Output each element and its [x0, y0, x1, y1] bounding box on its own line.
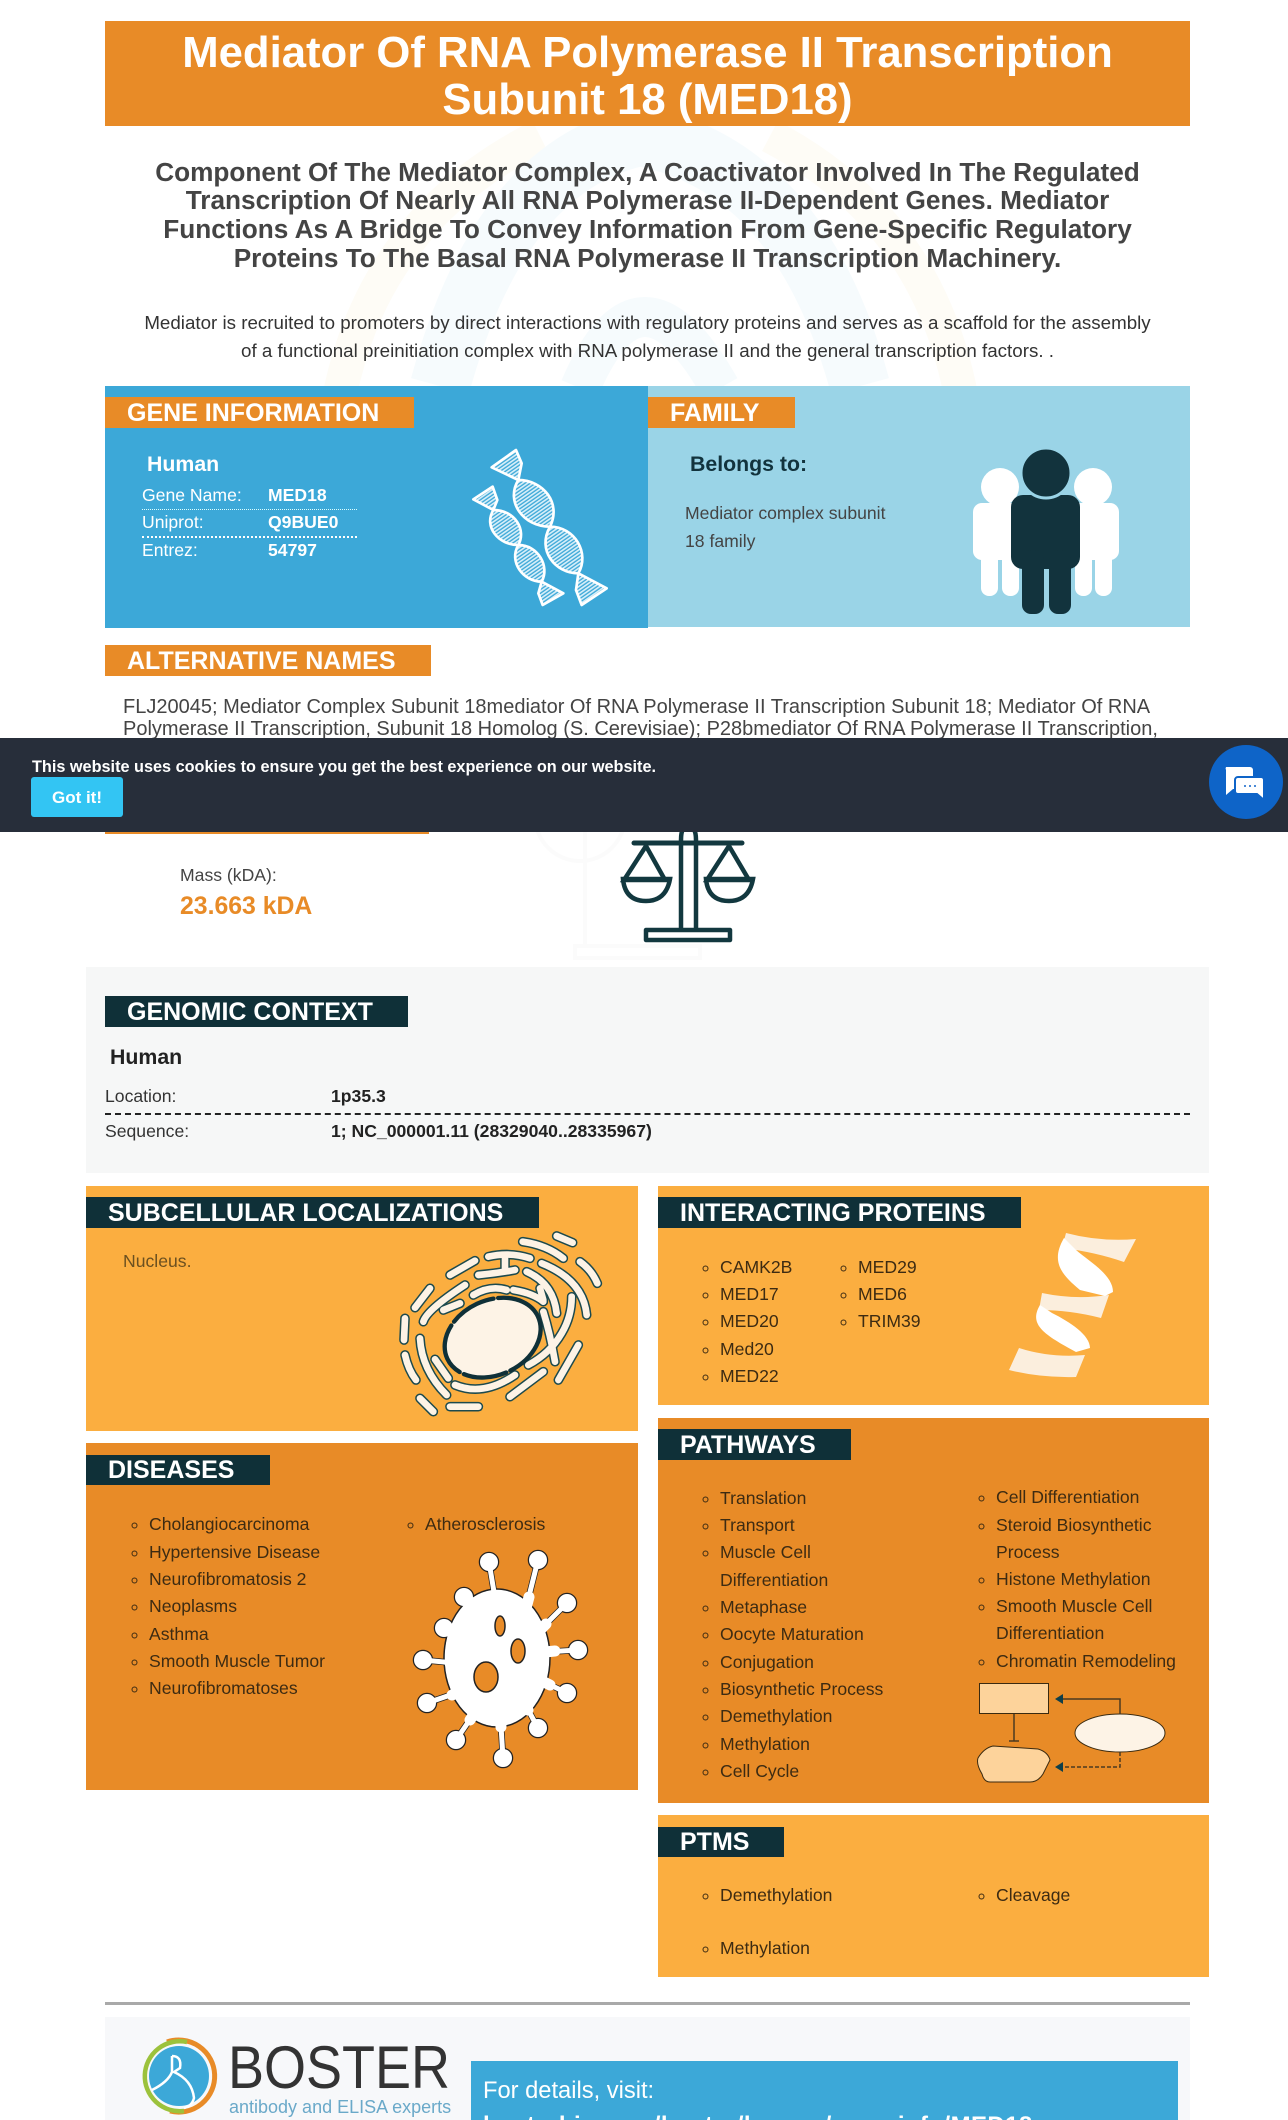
disease list column 1: Cholangiocarcinoma — [149, 1514, 309, 1534]
title banner — [105, 21, 1190, 126]
disease list column 1: Neurofibromatosis 2 — [149, 1569, 306, 1589]
belongs to label: Belongs to: — [690, 452, 807, 476]
icon: virus — [412, 1550, 588, 1768]
title banner: Mediator Of RNA Polymerase II Transcription — [182, 28, 1113, 77]
heading: alternative names: ALTERNATIVE NAMES — [127, 647, 396, 675]
panel: PTMs — [658, 1815, 1209, 1977]
pathway list column 2: Cell Differentiation — [996, 1487, 1139, 1507]
panel: genomic context: 1p35.3 — [331, 1086, 386, 1106]
protein list column 2: MED29 — [858, 1256, 917, 1276]
pathway list column 2: Histone Methylation — [996, 1569, 1151, 1589]
mass value: 23.663 kDA — [180, 893, 312, 920]
family text: Mediator complex subunit — [685, 503, 885, 523]
subtitle: Proteins To The Basal RNA Polymerase II Transcription Machinery. — [234, 243, 1061, 273]
pathway list column 1: Differentiation — [720, 1570, 828, 1590]
logo wordmark: BOSTER — [228, 2034, 450, 2101]
disease list column 1: Hypertensive Disease — [149, 1542, 320, 1562]
panel: interacting proteins — [658, 1186, 1209, 1405]
family text — [685, 503, 886, 551]
PTM list column 1: Methylation — [720, 1938, 810, 1958]
alternative names text: FLJ20045; Mediator Complex Subunit 18mediator Of RNA Polymerase II Transcription Subunit 18; Mediator Of RNA — [123, 696, 1150, 718]
heading: diseases — [86, 1455, 270, 1485]
heading: PTMs: PTMS — [680, 1828, 749, 1856]
panel: gene information — [105, 386, 648, 628]
cookie bar — [0, 738, 1288, 832]
description paragraph: Mediator is recruited to promoters by direct interactions with regulatory proteins and serves as a scaffold for the assembly — [144, 312, 1151, 333]
protein list column 1: CAMK2B — [720, 1256, 792, 1276]
heading: PTMs — [658, 1827, 784, 1857]
panel: genomic context — [86, 967, 1209, 1173]
panel: diseases — [86, 1443, 638, 1790]
heading: pathways: PATHWAYS — [680, 1431, 816, 1459]
gene fields: Q9BUE0 — [268, 512, 338, 532]
pathway list column 2: Process — [996, 1542, 1060, 1562]
pathway list column 2 — [978, 1487, 1176, 1671]
subtitle: Transcription Of Nearly All RNA Polymerase II-Dependent Genes. Mediator — [186, 185, 1109, 215]
title banner: Subunit 18 (MED18) — [442, 75, 853, 124]
pathway list column 1: Muscle Cell — [720, 1542, 811, 1562]
protein list column 1: MED20 — [720, 1311, 779, 1331]
pathway list column 1: Biosynthetic Process — [720, 1679, 883, 1699]
localization text: Nucleus. — [123, 1251, 191, 1271]
disease list column 1: Neoplasms — [149, 1596, 237, 1616]
protein list column 1: Med20 — [720, 1339, 774, 1359]
disease list column 2: Atherosclerosis — [425, 1514, 545, 1534]
sequence row: Sequence: — [105, 1121, 189, 1141]
gene fields: Gene Name: — [142, 485, 242, 505]
icon: pathway diagram — [977, 1683, 1166, 1782]
logo tagline: antibody and ELISA experts — [229, 2097, 451, 2117]
heading: gene information: GENE INFORMATION — [127, 399, 379, 427]
heading: family: FAMILY — [670, 399, 759, 427]
pathway list column 2: Chromatin Remodeling — [996, 1651, 1176, 1671]
subtitle: Functions As A Bridge To Convey Information From Gene-Specific Regulatory — [163, 214, 1132, 244]
icon: protein ribbon — [1009, 1233, 1136, 1378]
pathway list column 2: Differentiation — [996, 1623, 1104, 1643]
icon: people group — [973, 450, 1119, 614]
gene fields: 54797 — [268, 540, 317, 560]
details box — [471, 2061, 1178, 2120]
mass label: Mass (kDA): — [180, 865, 277, 885]
icon: balance scale — [620, 832, 756, 942]
gene fields: Uniprot: — [142, 512, 204, 532]
PTM list column 1: Demethylation — [720, 1885, 832, 1905]
cookie button: Got it! — [52, 788, 102, 807]
location row: Location: — [105, 1086, 176, 1106]
family text: 18 family — [685, 531, 755, 551]
cookie button — [31, 777, 123, 817]
gene fields — [142, 485, 357, 560]
pathway list column 1: Methylation — [720, 1734, 810, 1754]
PTM list column 1 — [702, 1885, 832, 1958]
pathway list column 1: Metaphase — [720, 1597, 807, 1617]
species label: Human — [147, 452, 219, 476]
icon: cell nucleus — [399, 1231, 602, 1416]
protein list column 2: TRIM39 — [858, 1311, 921, 1331]
heading: subcellular localizations: SUBCELLULAR LOCALIZATIONS — [108, 1199, 503, 1227]
molecular mass heading edge — [105, 820, 429, 834]
panel: genomic context: 1; NC_000001.11 (28329040..28335967) — [331, 1121, 652, 1141]
description paragraph: of a functional preinitiation complex with RNA polymerase II and the general transcription factors. . — [241, 340, 1054, 361]
PTM list column 2: Cleavage — [996, 1885, 1070, 1905]
subtitle: Component Of The Mediator Complex, A Coactivator Involved In The Regulated — [155, 156, 1140, 186]
protein list column 2: MED6 — [858, 1284, 907, 1304]
watermark: faint logo background — [324, 126, 976, 386]
cookie message: This website uses cookies to ensure you get the best experience on our website. — [32, 758, 656, 776]
details label: For details, visit: — [483, 2078, 654, 2104]
pathway list column 1: Cell Cycle — [720, 1761, 799, 1781]
heading: diseases: DISEASES — [108, 1456, 234, 1484]
pathway list column 2: Smooth Muscle Cell — [996, 1596, 1152, 1616]
heading: pathways — [658, 1429, 851, 1460]
heading: family — [648, 397, 795, 428]
pathway list column 1: Translation — [720, 1488, 806, 1508]
panel: pathways — [658, 1418, 1209, 1803]
description paragraph — [144, 312, 1151, 361]
protein list column 1 — [702, 1256, 792, 1386]
pathway list column 1: Conjugation — [720, 1652, 814, 1672]
panel: family — [648, 386, 1190, 627]
heading: interacting proteins: INTERACTING PROTEINS — [680, 1199, 986, 1227]
alternative names text: Polymerase II Transcription, Subunit 18 Homolog (S. Cerevisiae); P28bmediator Of RNA Polymerase II Transcription, — [123, 718, 1158, 740]
chat button — [1209, 745, 1283, 819]
heading: genomic context: GENOMIC CONTEXT — [127, 998, 373, 1026]
panel: subcellular localizations — [86, 1186, 638, 1431]
disease list column 1: Asthma — [149, 1624, 209, 1644]
panel: footer — [105, 2017, 1190, 2120]
species label: Human — [110, 1045, 182, 1069]
disease list column 1: Neurofibromatoses — [149, 1678, 298, 1698]
disease list column 1: Smooth Muscle Tumor — [149, 1651, 325, 1671]
gene fields: Entrez: — [142, 540, 198, 560]
disease list column 1 — [132, 1514, 325, 1698]
icon: DNA helices — [472, 448, 608, 606]
pathway list column 1 — [702, 1488, 883, 1781]
protein list column 1: MED22 — [720, 1366, 779, 1386]
divider — [105, 2002, 1190, 2005]
pathway list column 2: Steroid Biosynthetic — [996, 1514, 1152, 1534]
protein list column 2 — [840, 1256, 921, 1331]
alternative names text — [123, 696, 1158, 740]
pathway list column 1: Demethylation — [720, 1706, 832, 1726]
logo mark — [142, 2038, 218, 2115]
pathway list column 1: Oocyte Maturation — [720, 1624, 864, 1644]
protein list column 1: MED17 — [720, 1284, 779, 1304]
subtitle — [155, 156, 1140, 273]
pathway list column 1: Transport — [720, 1515, 795, 1535]
gene fields: MED18 — [268, 485, 327, 505]
